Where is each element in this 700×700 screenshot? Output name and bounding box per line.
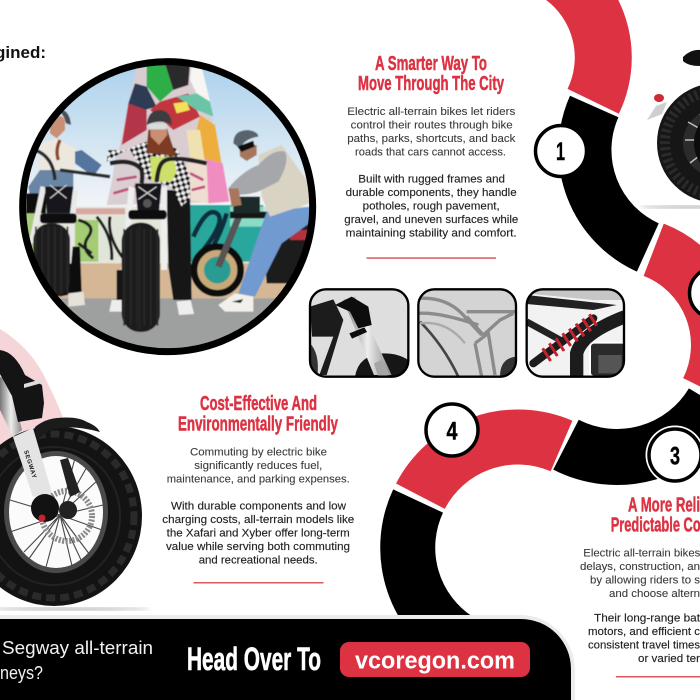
footer question text: [0, 638, 153, 683]
number badge 3: [646, 426, 700, 484]
heading: cost effective: Cost-Effective And: [200, 393, 317, 415]
paragraph: routes: control their routes through bike: [351, 120, 513, 132]
number badge 4: 4: [446, 418, 458, 446]
sky: [26, 68, 309, 207]
seat: [683, 50, 700, 66]
call to action: Head Over To: [187, 641, 321, 677]
right rider bike: [194, 197, 313, 293]
paragraph: routes: [347, 106, 516, 158]
paragraph: delays: [580, 548, 700, 600]
detail thumbnails: [310, 289, 627, 378]
paragraph: delays: and choose altern: [609, 588, 700, 600]
paragraph: battery: Their long-range bat: [594, 613, 700, 625]
heading: a smarter way: Move Through The City: [358, 73, 505, 95]
road segment: red 4: [420, 437, 562, 496]
heading: a smarter way: [358, 53, 505, 95]
heading: a smarter way: A Smarter Way To: [375, 53, 487, 75]
paragraph: durable components: [162, 500, 354, 566]
number badge 1: [536, 126, 586, 176]
pink accent shape: [0, 329, 63, 463]
heading: more reliable: [611, 495, 700, 537]
tail light: [654, 94, 664, 102]
ground: [58, 262, 287, 299]
centre rider: [107, 110, 194, 315]
road segment: black 5: [408, 501, 458, 640]
paragraph: delays: by allowing riders to s: [590, 574, 700, 586]
paragraph: commuting savings: Commuting by electric bike: [190, 447, 327, 459]
fork lower leg with label: [13, 428, 52, 497]
graffiti wall: [17, 205, 320, 265]
fork lower leg with label: SEGWAY: [22, 450, 37, 480]
url button: vcoregon.com: [355, 648, 515, 674]
left rider: [26, 108, 102, 307]
paragraph: rugged frames: Built with rugged frames and: [358, 174, 505, 186]
front motorcycle bottom left: [0, 329, 150, 610]
licence plate: [647, 102, 667, 120]
number badge 2: [690, 268, 700, 318]
centre bike: [110, 159, 207, 332]
rear motorcycle top right: [640, 50, 700, 209]
graffiti tower: [107, 63, 229, 205]
paragraph: battery: consistent travel times: [588, 640, 700, 652]
circular photo: riders with graffiti: [17, 57, 320, 362]
paragraph: battery: or varied ter: [638, 653, 700, 665]
rear tyre: [657, 83, 700, 203]
paragraph: rugged frames: maintaining stability and comfort.: [346, 228, 517, 240]
upper fork tube: [0, 377, 22, 437]
paragraph: commuting savings: significantly reduces fuel,: [194, 460, 322, 472]
heading: cost effective: [178, 393, 339, 436]
heading: cost effective: Environmentally Friendly: [178, 414, 339, 436]
serpentine road: [408, 0, 700, 640]
photo frame ring: [23, 62, 313, 352]
paragraph: delays: Electric all-terrain bikes: [583, 548, 700, 560]
paragraph: battery: motors, and efficient c: [588, 626, 700, 638]
road segment: red 2: [654, 250, 700, 391]
thumbnail: fork: [310, 289, 408, 377]
front wheel: [0, 418, 142, 606]
paragraph: durable components: and recreational needs.: [199, 554, 318, 566]
footer banner: [0, 615, 575, 700]
paragraph: commuting savings: [167, 447, 350, 486]
text block: section 1: [344, 53, 518, 259]
paragraph: routes: roads that cars cannot access.: [355, 146, 506, 158]
paragraph: durable components: the Xafari and Xyber offer long-term: [167, 528, 350, 540]
paragraph: routes: paths, parks, shortcuts, and back: [347, 133, 516, 145]
paragraph: rugged frames: durable components, they handle: [346, 187, 517, 199]
left bike: [32, 150, 110, 297]
thumbnail: red shock: [527, 289, 627, 378]
url button: [340, 642, 530, 677]
text block: section 4: [162, 393, 354, 584]
right rider: [218, 130, 312, 312]
ground shadow: [0, 608, 150, 610]
paragraph: battery: [588, 613, 700, 665]
footer question text: neys?: [0, 663, 43, 683]
red reflector: [38, 514, 46, 522]
paragraph: routes: Electric all-terrain bikes let riders: [347, 106, 516, 118]
axle: [31, 494, 59, 522]
road segment: black 1: [585, 106, 648, 248]
paragraph: rugged frames: potholes, rough pavement,: [363, 201, 500, 213]
road segment: red top: [563, 0, 603, 101]
footer question text: Segway all-terrain: [2, 638, 153, 658]
number badge 3: 3: [670, 442, 680, 470]
road segment: black 3: [566, 403, 700, 457]
number badge 4: [426, 404, 478, 456]
paragraph: delays: delays, construction, an: [580, 561, 700, 573]
headlight and controls: [0, 350, 44, 422]
thumbnail: frame: [418, 289, 517, 377]
paragraph: durable components: value while serving both commuting: [166, 541, 350, 553]
paragraph: rugged frames: gravel, and uneven surfaces while: [344, 214, 518, 226]
paragraph: durable components: With durable components and low: [171, 500, 347, 512]
number badge 1: 1: [556, 138, 565, 166]
ground shadow: [640, 206, 700, 208]
text block: section 3: [580, 495, 700, 678]
paragraph: durable components: charging costs, all-terrain models like: [162, 514, 354, 526]
paragraph: commuting savings: maintenance, and parking expenses.: [167, 474, 350, 486]
paragraph: rugged frames: [344, 174, 518, 240]
